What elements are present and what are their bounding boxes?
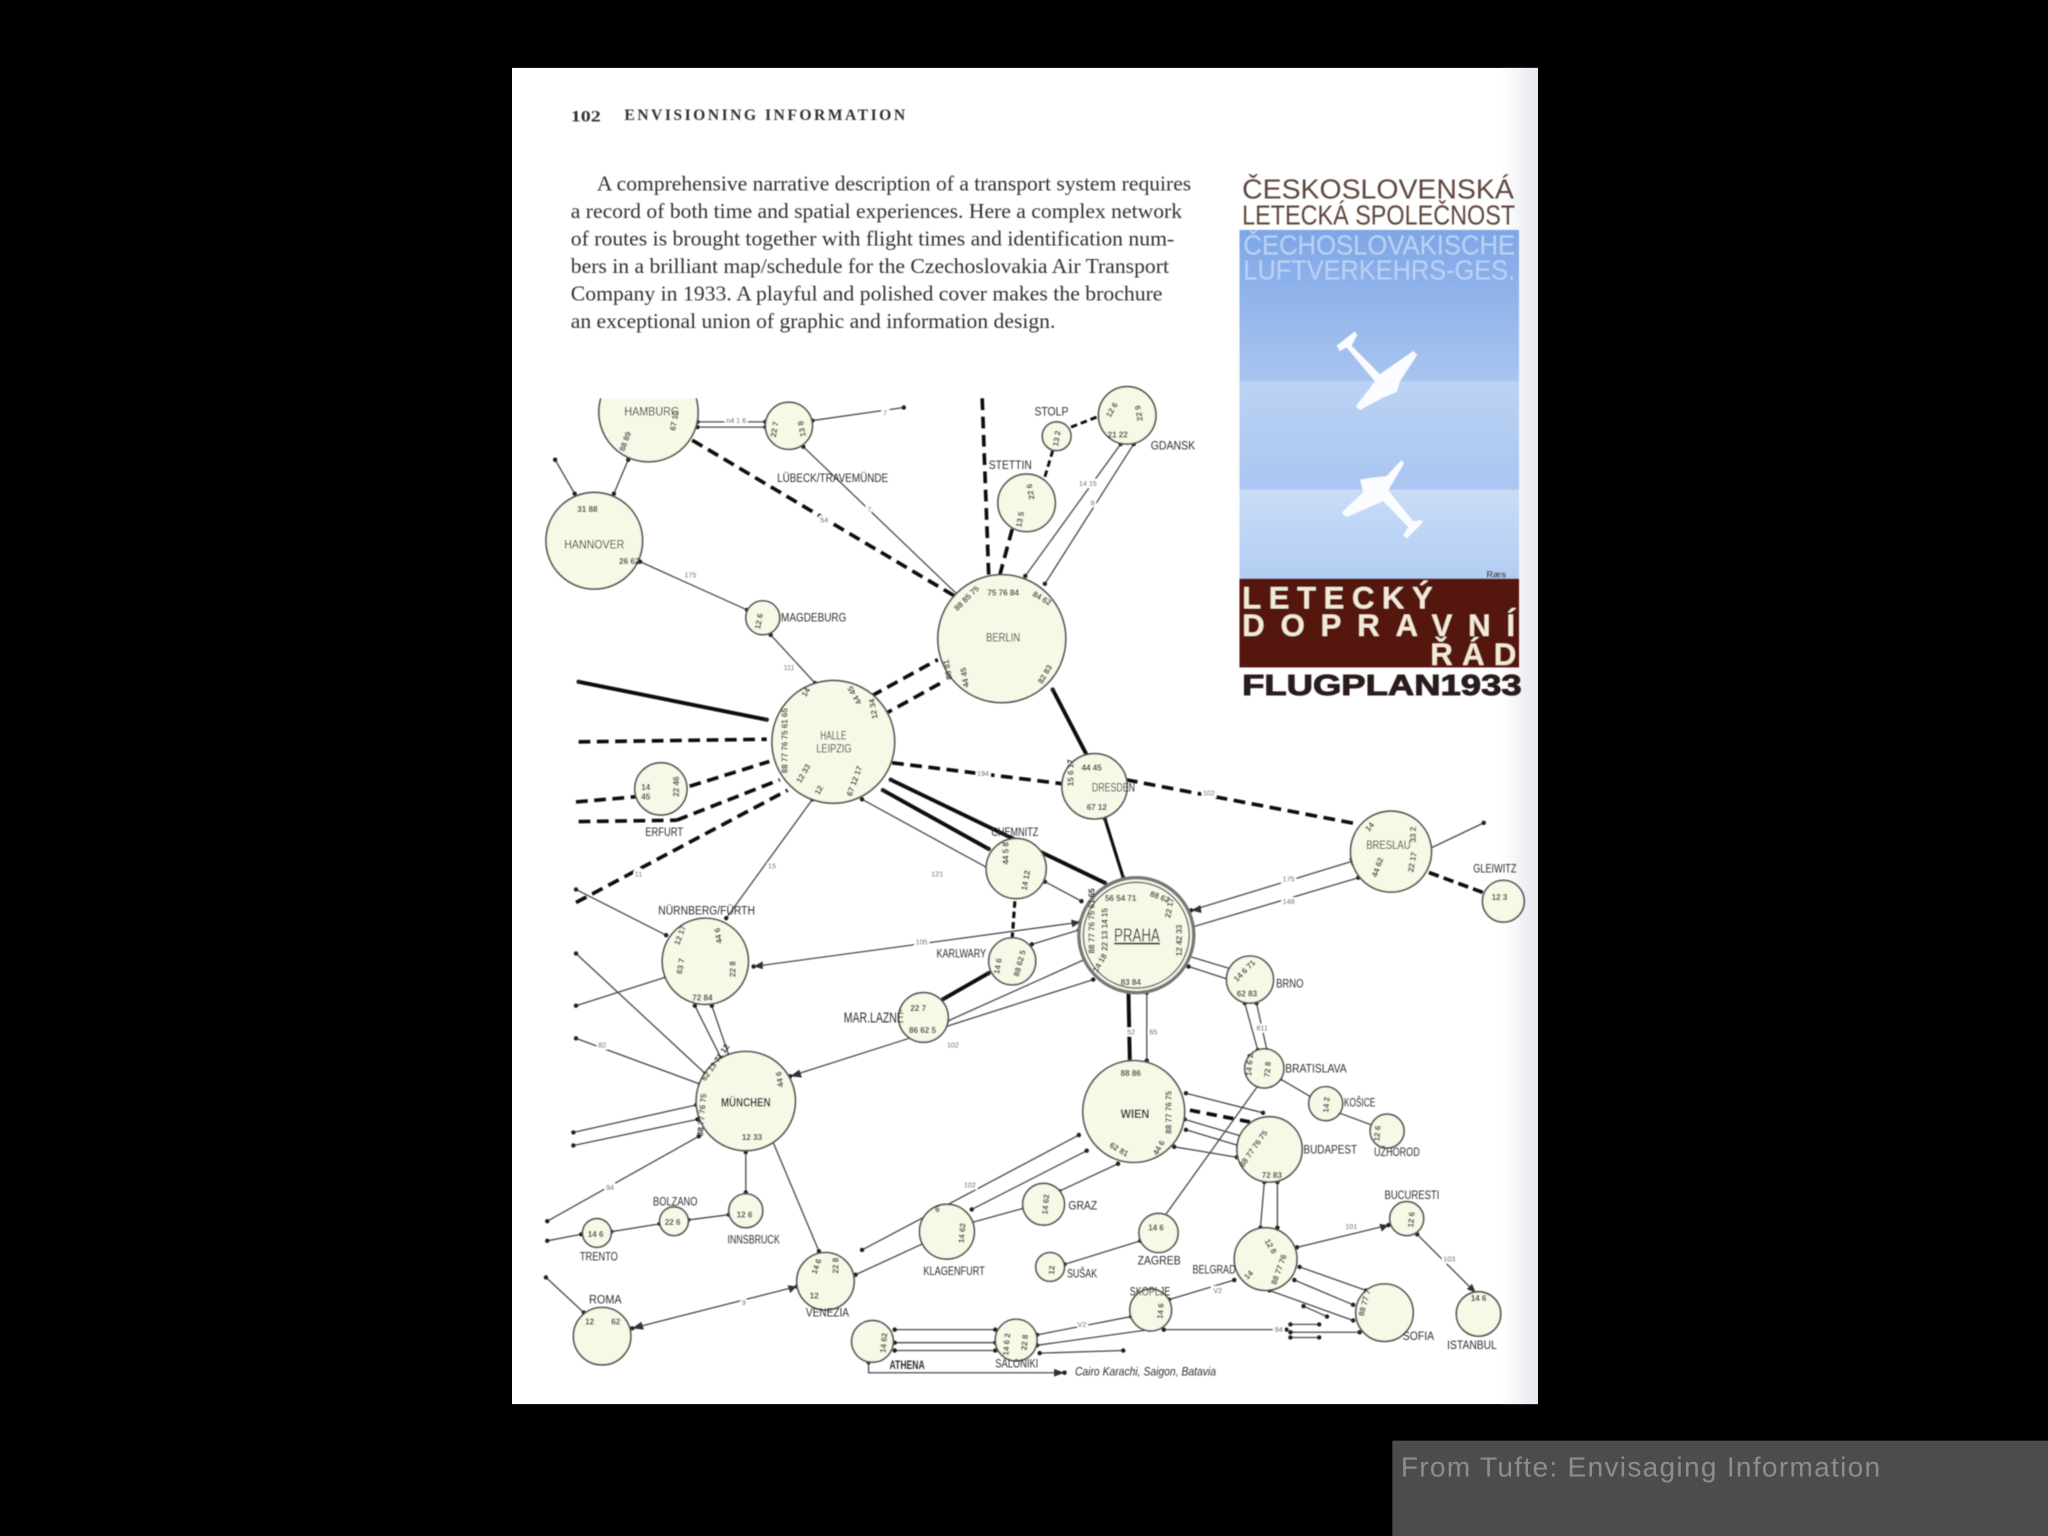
city labels: STOLP	[1034, 404, 1068, 418]
city labels: KARLWARY	[936, 946, 986, 960]
node: Praha, double ring: 12 42 33	[1175, 924, 1184, 956]
route numbers: V2	[1078, 1321, 1086, 1329]
node: Breslau	[1351, 811, 1432, 892]
node: Lubeck: 13 8	[796, 420, 808, 437]
node: Stettin	[998, 474, 1055, 532]
artist signature: Ræs	[1486, 569, 1506, 579]
node: Hamburg, clipped by the top of the map: 67 12	[668, 409, 681, 431]
node: Skoplje: 14 6	[1155, 1302, 1166, 1319]
node: Roma: 12	[585, 1317, 595, 1326]
route numbers: 14 15	[1079, 480, 1097, 488]
node: Uzhorod	[1370, 1114, 1404, 1148]
city labels: ERFURT	[645, 825, 683, 839]
city labels: KOŠICE	[1344, 1094, 1375, 1109]
node: Nurnberg: 72 84	[692, 993, 713, 1002]
city labels: GDANSK	[1151, 438, 1196, 452]
node: Marianske Lazne	[899, 993, 948, 1042]
poster german title: LUFTVERKEHRS-GES.	[1243, 255, 1515, 286]
node: Sofia	[1356, 1284, 1413, 1341]
node: Gdansk: 22 9	[1133, 404, 1145, 422]
maroon band with title	[1240, 579, 1519, 672]
node: Nurnberg: 22 8	[728, 961, 737, 977]
book page	[512, 68, 1538, 1404]
node: Erfurt: 22 46	[672, 776, 681, 797]
node: Innsbruck: 12 6	[737, 1210, 753, 1219]
node: Hamburg, clipped by the top of the map: HAMBURG	[624, 404, 679, 418]
icon: upper airplane	[1337, 331, 1417, 410]
route numbers: 102	[947, 1042, 959, 1050]
route numbers: n4 1 6	[726, 417, 746, 425]
node: Hamburg, clipped by the top of the map	[599, 398, 698, 462]
node: Belgrad: 14	[1242, 1268, 1255, 1281]
maroon band with title: ŘÁD	[1430, 636, 1516, 672]
node: Karlsbad: 14 6	[992, 957, 1004, 975]
node: Gleiwitz: 12 3	[1492, 893, 1508, 902]
route numbers: 103	[1443, 1256, 1455, 1264]
route numbers: 121	[931, 870, 943, 878]
node: Praha, double ring: 14 18	[1091, 952, 1109, 974]
node: Budapest: 88 77 76 75	[1238, 1128, 1270, 1169]
node: Bratislava: 72 8	[1263, 1061, 1273, 1078]
node: Belgrad: 12 8	[1263, 1237, 1279, 1256]
city labels: ATHENA	[889, 1358, 925, 1372]
node: Munchen: 12 33	[742, 1133, 763, 1142]
node: Hannover: 31 88	[577, 505, 598, 514]
node: Karlsbad: 88 62 5	[1012, 949, 1028, 977]
node: Athens: 14 62	[879, 1332, 889, 1353]
node: Innsbruck	[729, 1194, 763, 1228]
node: Karlsbad	[989, 938, 1036, 985]
node: Wien: 62 81	[1108, 1141, 1130, 1159]
route numbers: 7	[883, 409, 887, 417]
node: Breslau: 44 62	[1370, 856, 1386, 878]
node: Stolp: 13 2	[1051, 429, 1063, 447]
city labels: VENEZIA	[806, 1306, 850, 1320]
node: Magdeburg: 12 6	[753, 612, 765, 630]
node: Venezia: 22 8	[832, 1257, 841, 1273]
node: Venezia: 12	[810, 1291, 819, 1300]
city labels: GRAZ	[1068, 1198, 1098, 1212]
node: Halle Leipzig: LEIPZIG	[816, 741, 852, 755]
node: Zagreb: 14 6	[1148, 1223, 1164, 1232]
node: Chemnitz: 14 12	[1020, 869, 1032, 891]
city labels: INNSBRUCK	[728, 1232, 780, 1246]
node: Halle Leipzig: 14	[800, 686, 812, 698]
node: Halle Leipzig	[772, 680, 895, 803]
city labels: BRNO	[1276, 976, 1304, 990]
node: Praha, double ring: 88 77 76 75 61 65	[1088, 888, 1097, 953]
route numbers: 175	[1283, 876, 1295, 884]
route numbers: 9	[742, 1299, 746, 1307]
node: Berlin	[938, 575, 1066, 703]
maroon band with title: DOPRAVNÍ	[1242, 608, 1516, 643]
node: Trento: 14 6	[588, 1230, 604, 1239]
node: Budapest	[1237, 1117, 1302, 1182]
route numbers: 94	[606, 1184, 614, 1192]
node: Bucuresti: 12 6	[1406, 1211, 1417, 1228]
node: Munchen: MÜNCHEN	[721, 1094, 771, 1109]
caption text: From Tufte: Envisaging Information	[1401, 1452, 1880, 1483]
city labels: SOFIA	[1403, 1329, 1435, 1343]
node: Susak: 12	[1047, 1265, 1057, 1275]
icon: lower airplane	[1342, 460, 1423, 539]
node: Halle Leipzig: 12	[813, 784, 825, 796]
city labels: BUCURESTI	[1384, 1188, 1439, 1202]
city labels: SKOPLJE	[1130, 1285, 1170, 1299]
node: Erfurt	[635, 763, 687, 815]
city labels: GLEIWITZ	[1473, 861, 1517, 875]
poster title in brown	[1242, 174, 1515, 231]
node: Munchen: 44 6	[774, 1070, 786, 1088]
node: Wien: 44 6	[1151, 1138, 1167, 1157]
caption bar	[1392, 1441, 2048, 1536]
city labels: SALONIKI	[995, 1357, 1038, 1371]
city labels: ROMA	[589, 1293, 622, 1307]
node: Praha, double ring: 22 13 14 15	[1101, 908, 1110, 951]
thin routes	[546, 408, 1484, 1373]
node: Brno	[1226, 956, 1273, 1003]
node: Bucuresti	[1390, 1202, 1424, 1236]
node: Roma: 62	[611, 1317, 621, 1326]
node: Dresden: DRESDEN	[1092, 781, 1135, 795]
city labels: BOLZANO	[653, 1195, 698, 1209]
route numbers: 94	[1275, 1326, 1283, 1334]
node: Munchen	[696, 1042, 795, 1151]
node: Stettin: 13 5	[1014, 510, 1026, 528]
node: Venezia: 14 6	[810, 1257, 824, 1275]
node: Praha, double ring: PRAHA	[1114, 925, 1160, 946]
node: Dresden: 44 45	[1081, 764, 1102, 773]
node: Klagenfurt: 14 62	[957, 1222, 968, 1244]
node: Roma	[573, 1307, 631, 1365]
node: Saloniki: 14 6 2	[1001, 1332, 1012, 1356]
body paragraph: A comprehensive narrative description of a transport system requires	[597, 172, 1191, 196]
node: Graz	[1023, 1183, 1064, 1225]
route numbers: 82	[598, 1042, 606, 1050]
node: Stolp	[1042, 422, 1071, 451]
node: Zagreb	[1139, 1213, 1178, 1253]
node: Venezia	[797, 1253, 854, 1310]
node: Munchen: 88 77 76 75	[696, 1093, 708, 1137]
route numbers: 105	[916, 938, 928, 946]
node: Susak	[1036, 1253, 1064, 1281]
node: Halle Leipzig: 44 45	[846, 684, 864, 706]
poster german title: ČECHOSLOVAKISCHE	[1243, 230, 1515, 261]
node: Hannover	[546, 492, 643, 589]
city labels: TRENTO	[580, 1249, 618, 1263]
node: Breslau: 33 2	[1409, 826, 1418, 842]
city labels: STETTIN	[989, 458, 1032, 472]
node: Wien: 88 86	[1121, 1069, 1141, 1078]
poster german title	[1243, 230, 1515, 286]
node: Skoplje	[1130, 1289, 1172, 1331]
node: Berlin: 84 62	[1031, 590, 1053, 608]
node: Uzhorod: 12 6	[1372, 1125, 1383, 1142]
body paragraph: bers in a brilliant map/schedule for the Czechoslovakia Air Transport	[571, 254, 1169, 278]
city labels: ZAGREB	[1138, 1253, 1181, 1267]
node: Halle Leipzig: 12 34	[867, 698, 880, 720]
node: Berlin: 82 83	[1036, 663, 1054, 685]
node: Berlin: 44 45	[959, 666, 971, 688]
node: Nurnberg: 12 17	[673, 924, 688, 946]
node: Breslau: 14	[1363, 820, 1376, 833]
route numbers: 8	[1091, 499, 1095, 507]
city labels: KLAGENFURT	[923, 1264, 985, 1278]
city labels: CHEMNITZ	[991, 825, 1039, 839]
city labels: SUŠAK	[1067, 1265, 1098, 1280]
city labels: BELGRAD	[1192, 1262, 1236, 1276]
route numbers: 611	[1256, 1025, 1268, 1033]
page header: ENVISIONING INFORMATION	[624, 107, 906, 124]
node: Chemnitz: 44 5 8	[1001, 842, 1010, 865]
node: Berlin: 88 81	[942, 658, 954, 680]
node: Gdansk: 21 22	[1108, 431, 1128, 440]
node: Kosice: 14 2	[1321, 1096, 1332, 1113]
route numbers: 54	[820, 516, 828, 524]
city labels: BRATISLAVA	[1285, 1061, 1347, 1075]
route numbers: 15	[768, 863, 776, 871]
city labels	[580, 404, 1517, 1378]
node: Stettin: 22 6	[1025, 483, 1036, 500]
route numbers: 65	[1149, 1028, 1157, 1036]
node: Berlin: 75 76 84	[987, 589, 1019, 598]
node: Nurnberg	[662, 918, 748, 1004]
node: Brno: 62 83	[1237, 990, 1258, 999]
node: Hannover: 26 62	[619, 557, 640, 566]
dashed heavy routes	[576, 398, 1489, 1122]
city labels: BUDAPEST	[1304, 1142, 1357, 1156]
node: Nurnberg: 44 6	[713, 927, 724, 944]
node: Hannover: HANNOVER	[564, 538, 624, 552]
node: Sofia: 88 77 7	[1357, 1288, 1373, 1317]
route numbers: 194	[977, 770, 989, 778]
body paragraph: Company in 1933. A playful and polished cover makes the brochure	[571, 281, 1162, 305]
node: Gdansk	[1098, 387, 1156, 444]
body paragraph: of routes is brought together with flight times and identification num-	[571, 227, 1174, 251]
node: Dresden: 15 6 17	[1067, 759, 1076, 786]
city labels: Cairo Karachi, Saigon, Batavia	[1075, 1364, 1216, 1378]
node: Graz: 14 62	[1041, 1193, 1051, 1215]
node: Budapest: 72 83	[1262, 1171, 1282, 1180]
city labels: NÜRNBERG/FÜRTH	[658, 903, 755, 917]
node: Berlin: 88 85 75	[952, 584, 981, 613]
node: Hamburg, clipped by the top of the map: 88 89	[618, 430, 633, 453]
city labels: ISTANBUL	[1447, 1338, 1497, 1352]
node: Istanbul	[1456, 1292, 1501, 1336]
node: Bratislava: 14 6 2	[1244, 1053, 1255, 1076]
node: Trento	[583, 1219, 611, 1247]
node: Wien	[1083, 1061, 1185, 1162]
node: Belgrad	[1234, 1228, 1297, 1290]
node: Praha, double ring: 83 84	[1121, 978, 1141, 987]
node: Halle Leipzig: 12 33	[795, 762, 813, 785]
node: Saloniki: 22 8	[1020, 1334, 1030, 1351]
route numbers: 52	[1127, 1028, 1135, 1036]
route network map	[546, 387, 1524, 1378]
poster title in brown: ČESKOSLOVENSKÁ	[1242, 174, 1515, 205]
route numbers: 148	[1283, 898, 1295, 906]
route numbers: 7	[867, 506, 871, 514]
page header: 102	[571, 108, 601, 125]
node: Wien: WIEN	[1121, 1107, 1149, 1121]
node: Bratislava	[1244, 1049, 1284, 1088]
city labels: MAGDEBURG	[781, 611, 846, 625]
node: Berlin: BERLIN	[986, 630, 1020, 644]
node: Marianske Lazne: 22 7	[910, 1004, 927, 1013]
node: Breslau: BRESLAU	[1366, 838, 1411, 852]
node: Istanbul: 14 6	[1471, 1294, 1487, 1303]
city labels: LÜBECK/TRAVEMÜNDE	[777, 471, 888, 485]
node: Bolzano: 22 6	[665, 1218, 681, 1227]
body paragraph: an exceptional union of graphic and information design.	[571, 309, 1055, 333]
node: Belgrad: 88 77 76	[1270, 1253, 1289, 1286]
node: Nurnberg: 63 7	[675, 957, 687, 975]
route numbers: 111	[784, 664, 795, 672]
node: Saloniki	[995, 1319, 1037, 1361]
node: Magdeburg	[746, 601, 780, 635]
node: Erfurt: 45	[641, 792, 651, 801]
node: Kosice	[1309, 1087, 1343, 1121]
route numbers	[598, 409, 1455, 1334]
poster: brochure cover	[1240, 174, 1522, 702]
node: Gleiwitz	[1482, 880, 1524, 922]
route numbers: 175	[684, 571, 696, 579]
node: Praha, double ring	[1079, 878, 1194, 993]
node: Lubeck	[765, 402, 812, 449]
node: Klagenfurt: 6	[935, 1205, 940, 1214]
node: Praha, double ring: 56 54 71	[1105, 894, 1137, 903]
node: Halle Leipzig: 88 77 76 75 61 65	[781, 708, 790, 773]
flugplan line: FLUGPLAN1933	[1242, 670, 1522, 702]
node: Praha, double ring: 88 62	[1149, 889, 1171, 905]
body paragraph	[571, 172, 1191, 333]
node: Marianske Lazne: 86 62 5	[909, 1026, 937, 1035]
city labels: MAR.LAZNĚ	[844, 1010, 904, 1027]
node: Praha, double ring: 22 17	[1163, 897, 1176, 919]
solid heavy routes	[579, 682, 1130, 1061]
route numbers: 102	[1203, 789, 1215, 797]
node: Bolzano	[660, 1207, 688, 1236]
poster title in brown: LETECKÁ SPOLEČNOST	[1242, 200, 1515, 231]
node: Dresden	[1062, 754, 1135, 819]
city labels: UŽHOROD	[1374, 1144, 1420, 1159]
route arrowheads	[632, 593, 1476, 1377]
node: Wien: 88 77 76 75	[1165, 1091, 1174, 1134]
node: Halle Leipzig: 67 12 17	[845, 764, 864, 797]
node: Munchen: 62 13 71 12	[700, 1042, 732, 1083]
route numbers: 101	[1345, 1223, 1357, 1231]
node: Dresden: 67 12	[1087, 803, 1107, 812]
route numbers: 11	[635, 870, 642, 878]
node: Lubeck: 22 7	[769, 420, 781, 438]
node: Halle Leipzig: HALLE	[820, 728, 846, 742]
route numbers: 102	[964, 1181, 976, 1189]
node: Brno: 14 6 71	[1232, 958, 1258, 984]
node: Klagenfurt	[920, 1204, 974, 1259]
body paragraph: a record of both time and spatial experiences. Here a complex network	[571, 199, 1182, 223]
node: Chemnitz	[986, 839, 1046, 899]
poster sky	[1240, 230, 1519, 580]
node: Athens	[852, 1320, 893, 1362]
maroon band with title: LETECKÝ	[1242, 581, 1433, 616]
route numbers: V2	[1213, 1287, 1222, 1295]
node: Erfurt: 14	[641, 783, 651, 792]
node: Breslau: 22 17	[1406, 851, 1419, 873]
node: Gdansk: 12 6	[1104, 400, 1120, 419]
